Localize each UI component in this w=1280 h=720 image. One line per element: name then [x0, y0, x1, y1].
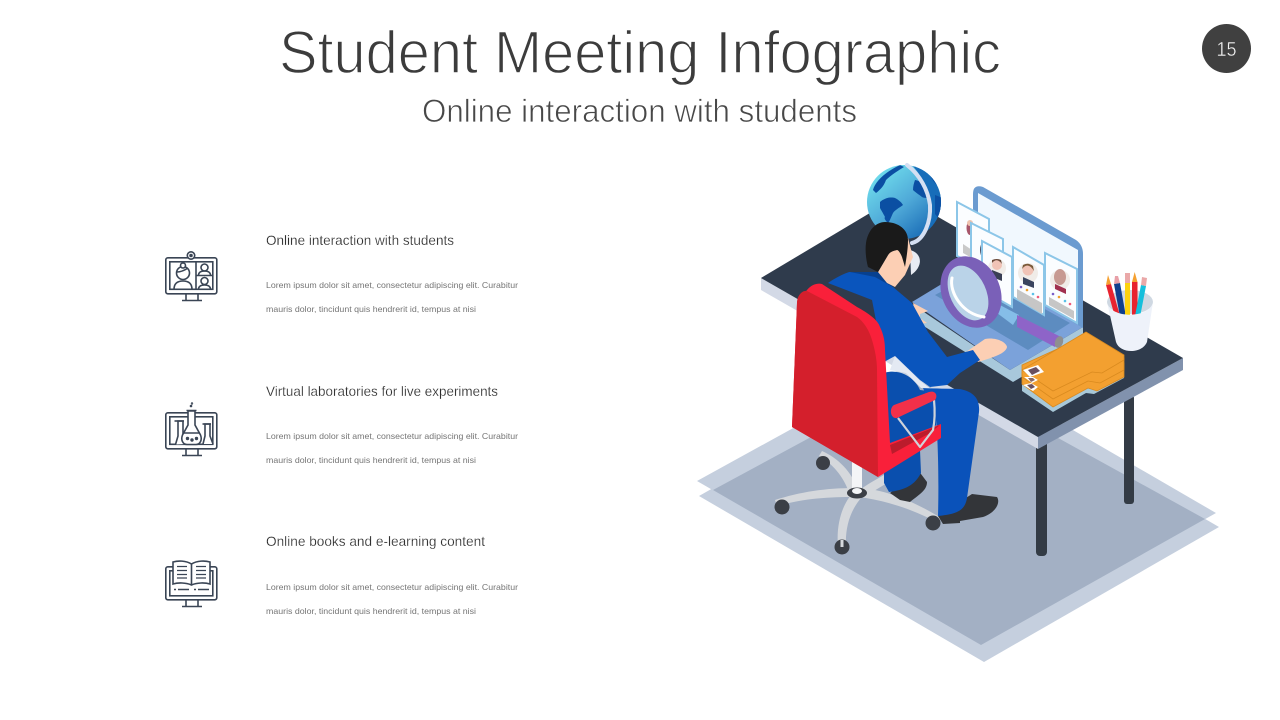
page number badge: 15 — [1216, 39, 1236, 61]
far shoe — [890, 470, 927, 502]
near shoe — [938, 494, 998, 524]
chair base — [774, 451, 941, 554]
globe — [867, 160, 945, 245]
far leg — [884, 372, 936, 492]
magnifying glass — [929, 246, 1065, 349]
heading: Online books and e-learning content — [266, 533, 485, 549]
body text: mauris dolor, tincidunt quis hendrerit id, tempus at nisi — [266, 304, 476, 314]
desk legs — [1036, 395, 1134, 556]
title: Student Meeting Infographic — [279, 19, 1001, 86]
shirt — [890, 356, 953, 389]
body text: Lorem ipsum dolor sit amet, consectetur adipiscing elit. Curabitur — [266, 280, 518, 290]
body text — [266, 431, 518, 465]
icon: video call monitor — [166, 252, 217, 300]
icon: open book monitor — [166, 561, 217, 606]
body text: mauris dolor, tincidunt quis hendrerit id, tempus at nisi — [266, 606, 476, 616]
chair back — [792, 284, 941, 477]
laptop screen — [973, 186, 1083, 328]
icon: lab flasks monitor — [166, 403, 217, 456]
item 2: virtual laboratories — [166, 383, 518, 465]
hands — [966, 339, 1007, 362]
pencil cup — [1106, 272, 1153, 351]
floor mat — [697, 350, 1219, 662]
office chair — [792, 284, 941, 477]
subtitle: Online interaction with students — [422, 93, 857, 129]
near leg — [923, 388, 979, 516]
item 1: online interaction — [166, 232, 518, 314]
torso and arm — [828, 272, 980, 387]
profile cards — [957, 202, 1077, 323]
laptop — [912, 186, 1083, 382]
heading: Online interaction with students — [266, 232, 454, 248]
body text: Lorem ipsum dolor sit amet, consectetur adipiscing elit. Curabitur — [266, 582, 518, 592]
body text — [266, 582, 518, 616]
desk — [761, 195, 1183, 449]
body text: mauris dolor, tincidunt quis hendrerit id, tempus at nisi — [266, 455, 476, 465]
collar — [850, 272, 893, 287]
page number badge — [1202, 24, 1251, 73]
body text: Lorem ipsum dolor sit amet, consectetur adipiscing elit. Curabitur — [266, 431, 518, 441]
hair — [866, 222, 908, 272]
keyboard deck — [912, 304, 1083, 382]
illustration: student at desk — [697, 160, 1219, 662]
body text — [266, 280, 518, 314]
armrest strut — [898, 400, 935, 447]
heading: Virtual laboratories for live experiments — [266, 383, 498, 399]
folders — [1022, 332, 1124, 412]
person — [828, 222, 1007, 524]
neck and face — [878, 238, 913, 287]
headset — [910, 250, 920, 275]
armrest — [891, 392, 936, 418]
item 3: online books — [166, 533, 518, 616]
